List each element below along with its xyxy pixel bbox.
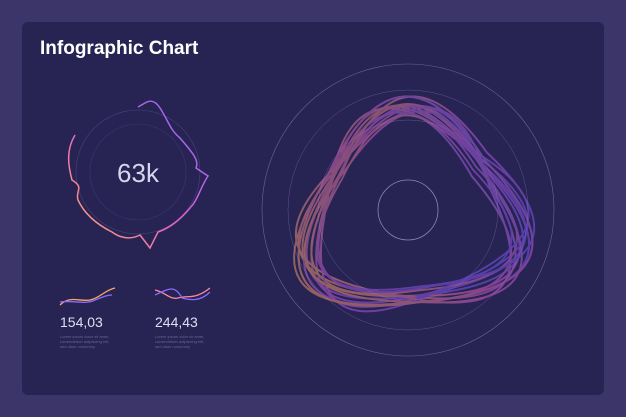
stat 2: 244,43 xyxy=(155,314,198,330)
mini chart 2 xyxy=(155,288,210,300)
stat 1 caption: Lorem ipsum dolor sit amet, consectetuer adipiscing elit, sed diam nonummy xyxy=(60,334,109,349)
stat 2 caption: Lorem ipsum dolor sit amet, consectetuer adipiscing elit, sed diam nonummy xyxy=(155,334,204,349)
donut chart: 63k xyxy=(69,101,208,248)
mini chart 1 xyxy=(60,288,115,305)
donut chart: 63k: 63k xyxy=(117,158,160,188)
stat 1: 154,03 xyxy=(60,314,103,330)
title: Infographic Chart xyxy=(40,38,198,59)
radial chart xyxy=(262,64,554,356)
